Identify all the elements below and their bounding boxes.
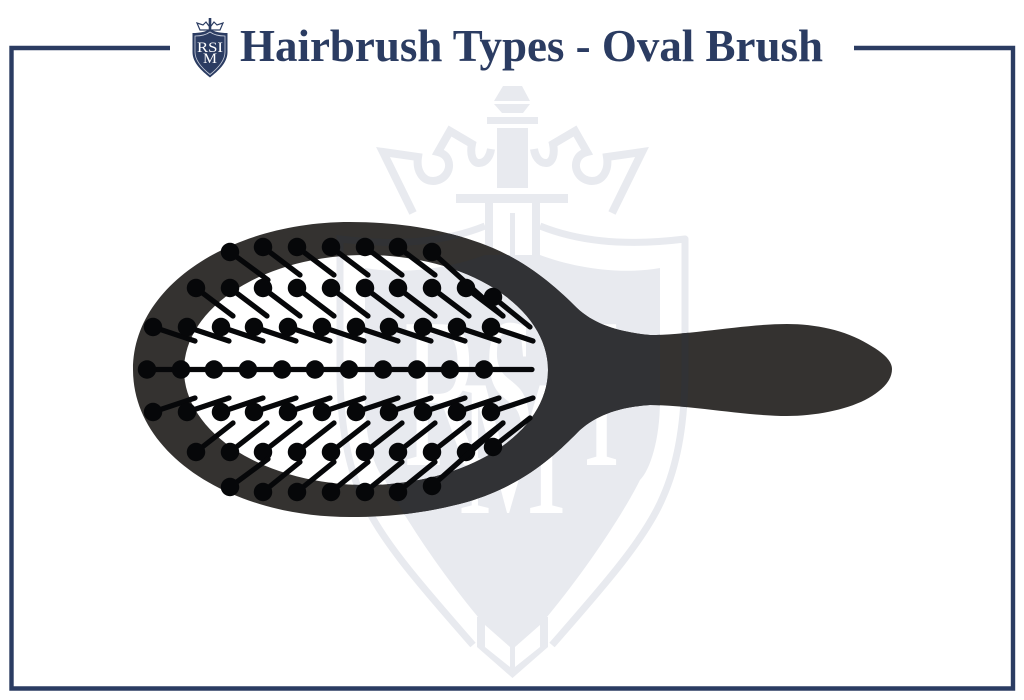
watermark: shield inner fill: [365, 255, 660, 647]
logo: monogram: [197, 40, 223, 67]
watermark: sword hilt and grip: [456, 117, 568, 203]
title: Hairbrush Types - Oval Brush: [240, 20, 823, 71]
brush: oval head and handle: [133, 222, 892, 517]
logo: crown: [197, 22, 223, 30]
watermark: shield bottom point: [477, 617, 548, 678]
watermark: shield point panels: [485, 625, 540, 667]
logo: monogram: RSI: [197, 40, 223, 56]
watermark: monogram letters: [403, 273, 620, 556]
pin row 5: [153, 398, 533, 412]
pin row 3: [153, 327, 533, 341]
brush pins: [147, 247, 533, 492]
watermark: shield outer outline: [340, 226, 685, 645]
watermark: crown left: [383, 131, 491, 213]
watermark: crest: [340, 86, 685, 678]
watermark: monogram letters: R: [403, 273, 483, 512]
watermark: monogram letters: I: [583, 273, 620, 512]
watermark: monogram letters: S: [483, 273, 535, 512]
watermark: sword blade: [485, 203, 540, 258]
watermark: sword pommel: [494, 86, 530, 113]
pin row 2: [196, 288, 530, 327]
logo: small crest: [192, 18, 228, 78]
watermark: crown right: [534, 131, 642, 213]
brush body: [132, 222, 892, 517]
logo: shield inner line: [195, 32, 225, 74]
logo: sword: [209, 18, 211, 33]
logo: monogram: M: [203, 51, 217, 67]
pin row 6: [196, 418, 530, 452]
pin row 7: [230, 423, 503, 492]
brush: watermark tint through body: [336, 233, 688, 514]
logo: shield outline: [192, 29, 228, 78]
pin row 1: [230, 247, 503, 316]
pin row 4: centre: [147, 367, 532, 372]
watermark: monogram letters: M: [458, 340, 566, 556]
